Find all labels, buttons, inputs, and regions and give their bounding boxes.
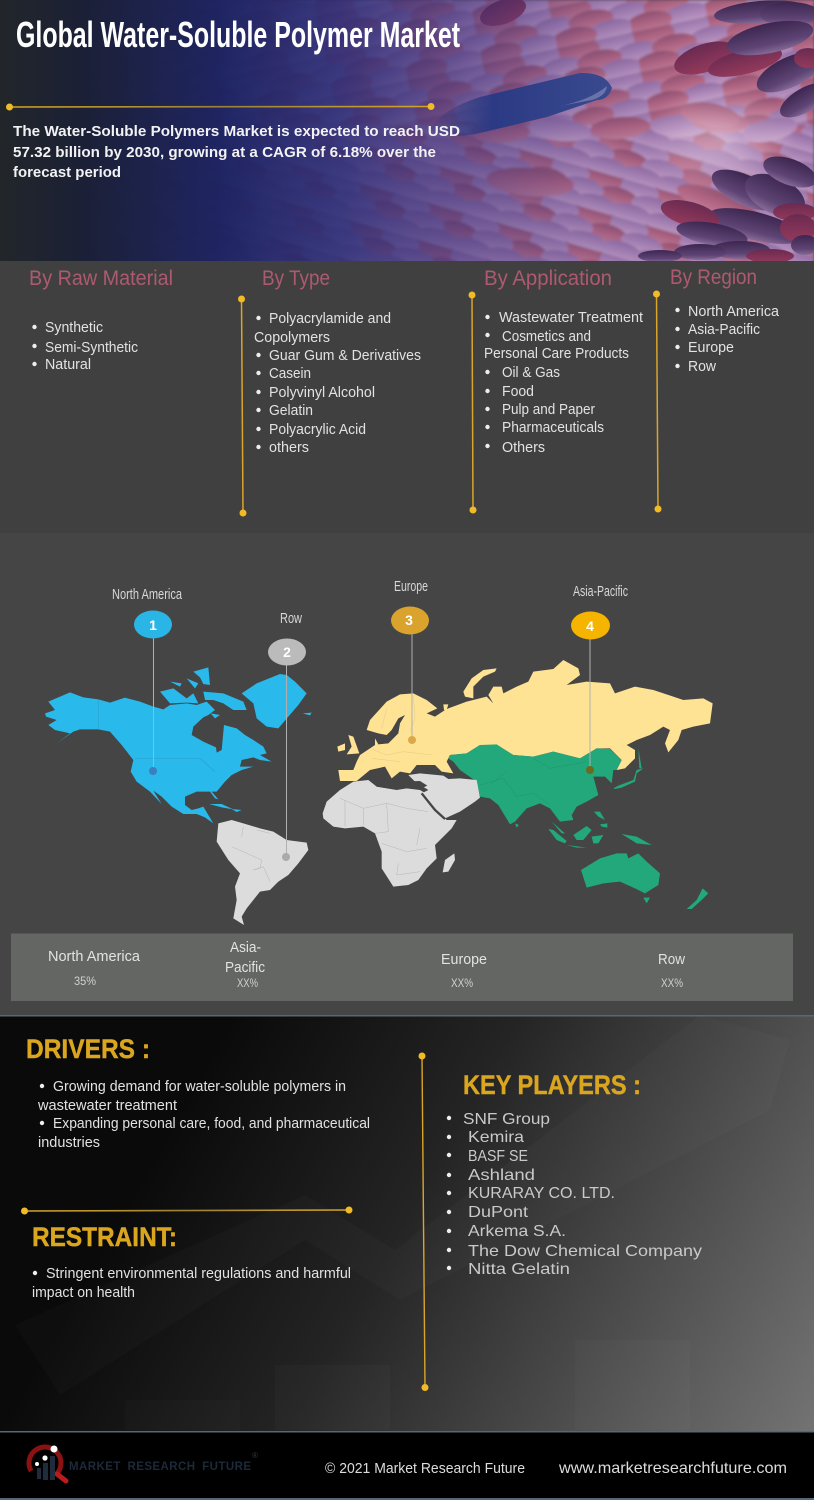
- drivers: [26, 1034, 370, 1151]
- asia pacific: [448, 744, 708, 909]
- vertical divider: [418, 1052, 428, 1391]
- key players: The Dow Chemical Company: [468, 1243, 702, 1260]
- title: Global Water-Soluble Polymer Market: [16, 14, 460, 55]
- column: by application: [468, 267, 644, 514]
- column: by type: Copolymers: [254, 329, 330, 346]
- pin 4: asia-pacific: Asia-Pacific: [573, 583, 628, 600]
- column: by application: Cosmetics and: [502, 328, 591, 345]
- share: north america: 35%: [74, 974, 96, 988]
- panel: segmentation: [0, 261, 814, 533]
- pin 2: row: 2: [283, 644, 291, 660]
- logo: MARKET RESEARCH FUTURE: [69, 1461, 251, 1473]
- logo: ®: [252, 1451, 258, 1460]
- header banner: [0, 0, 814, 265]
- americas map: [45, 667, 312, 925]
- column: by raw material: [29, 267, 173, 373]
- pin 2: row: [268, 610, 306, 861]
- drivers: DRIVERS :: [26, 1034, 150, 1064]
- column: by type: [238, 267, 421, 516]
- pin 2: row: Row: [280, 610, 302, 627]
- column: by type: Gelatin: [269, 402, 313, 419]
- south america: [217, 820, 308, 925]
- key players: Kemira: [468, 1129, 524, 1146]
- column: by region: Europe: [688, 339, 734, 356]
- column: by raw material: Semi-Synthetic: [45, 339, 138, 356]
- drivers: wastewater treatment: [37, 1097, 178, 1114]
- column: by type: By Type: [262, 267, 330, 290]
- africa, middle east and asia pacific map: [323, 744, 708, 909]
- drivers: Expanding personal care, food, and pharmaceutical: [53, 1115, 370, 1132]
- column: by type: Casein: [269, 365, 311, 382]
- column: by region: Row: [688, 358, 716, 375]
- column: by application: Food: [502, 383, 534, 400]
- pin 3: europe: Europe: [394, 578, 428, 595]
- share: asia-pacific: [225, 939, 265, 990]
- key players: DuPont: [468, 1204, 529, 1221]
- pin 1: north america: North America: [112, 586, 182, 603]
- share: north america: [48, 948, 141, 988]
- key players: Ashland: [468, 1167, 535, 1184]
- pin 1: north america: 1: [149, 617, 157, 633]
- pin 4: asia-pacific: [571, 583, 628, 774]
- column: by region: North America: [688, 303, 780, 320]
- website: www.marketresearchfuture.com: [558, 1460, 787, 1477]
- intro text: The Water-Soluble Polymers Market is expected to reach USD: [13, 123, 460, 140]
- intro text: 57.32 billion by 2030, growing at a CAGR of 6.18% over the: [13, 144, 436, 161]
- key players: SNF Group: [463, 1111, 550, 1128]
- copyright: © 2021 Market Research Future: [325, 1460, 525, 1477]
- restraint: Stringent environmental regulations and harmful: [46, 1265, 351, 1282]
- column: by type: Polyvinyl Alcohol: [269, 384, 375, 401]
- share: asia-pacific: XX%: [237, 976, 258, 990]
- pin 4: asia-pacific: 4: [586, 618, 594, 634]
- key players: Nitta Gelatin: [468, 1261, 570, 1278]
- eurasia map: [337, 660, 713, 781]
- europe and russia: [337, 660, 713, 781]
- divider line with dots: [6, 103, 434, 110]
- column: by raw material: By Raw Material: [29, 267, 173, 290]
- footer: [0, 1431, 814, 1500]
- column: by region: Asia-Pacific: [688, 321, 760, 338]
- pin 3: europe: [391, 578, 429, 744]
- panel: drivers, restraint, key players: [0, 1015, 814, 1431]
- pin 1: north america: [112, 586, 182, 775]
- restraint: impact on health: [32, 1284, 135, 1301]
- key players: KEY PLAYERS :: [463, 1070, 641, 1100]
- share: north america: North America: [48, 948, 141, 965]
- column: by type: Polyacrylic Acid: [269, 421, 366, 438]
- intro text: [13, 123, 460, 181]
- blue finger shape: [430, 73, 612, 136]
- restraint divider: [21, 1206, 352, 1214]
- north america: [45, 667, 312, 823]
- panel: world map: [0, 533, 814, 1015]
- intro text: forecast period: [13, 164, 121, 181]
- drivers: industries: [38, 1134, 100, 1151]
- column: by application: Wastewater Treatment: [499, 309, 644, 326]
- column: by type: Guar Gum & Derivatives: [269, 347, 421, 364]
- column: by application: Pulp and Paper: [502, 401, 595, 418]
- column: by raw material: Natural: [45, 356, 91, 373]
- key players: BASF SE: [468, 1148, 528, 1165]
- share: europe: [441, 951, 487, 990]
- drivers: Growing demand for water-soluble polymers in: [53, 1078, 346, 1095]
- pin 3: europe: 3: [405, 612, 413, 628]
- share: asia-pacific: Asia-: [230, 939, 261, 956]
- africa and middle east: [323, 773, 480, 887]
- column: by region: [653, 266, 780, 512]
- column: by application: Others: [502, 439, 545, 456]
- column: by application: Oil & Gas: [502, 364, 560, 381]
- column: by type: Polyacrylamide and: [269, 310, 391, 327]
- column: by raw material: Synthetic: [45, 319, 103, 336]
- column: by region: By Region: [670, 266, 757, 289]
- column: by application: Pharmaceuticals: [502, 419, 604, 436]
- column: by application: By Application: [484, 267, 612, 290]
- key players: KURARAY CO. LTD.: [468, 1185, 615, 1202]
- column: by application: Personal Care Products: [484, 345, 629, 362]
- key players: Arkema S.A.: [468, 1223, 566, 1240]
- column: by type: others: [269, 439, 309, 456]
- share: europe: Europe: [441, 951, 487, 968]
- share: europe: XX%: [451, 976, 473, 990]
- logo: [23, 1441, 258, 1485]
- share: row: XX%: [661, 976, 683, 990]
- share: row: [658, 951, 685, 990]
- share: row: Row: [658, 951, 685, 968]
- share: asia-pacific: Pacific: [225, 959, 265, 976]
- restraint: [32, 1222, 351, 1301]
- regional share bar: [11, 934, 793, 1001]
- restraint: RESTRAINT:: [32, 1222, 177, 1252]
- key players: [447, 1070, 702, 1278]
